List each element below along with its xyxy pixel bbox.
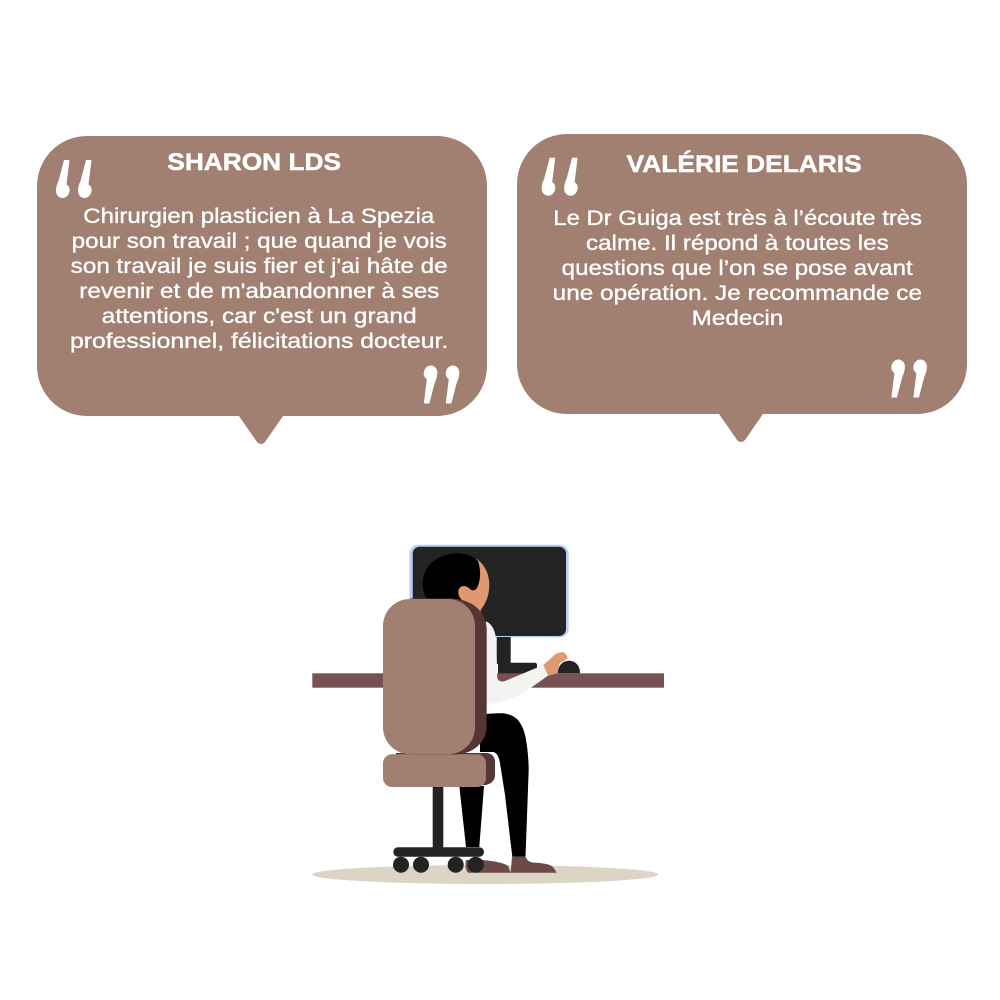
panel: testimonial Sharon LDS [37,136,487,444]
testimonial text: professionnel, félicitations docteur. [70,329,448,353]
icon: closing quote [891,360,927,398]
testimonial text: revenir et de m'abandonner à ses [79,279,439,303]
mouse [558,661,580,673]
panel: testimonial Valérie Delaris [517,134,967,442]
far leg [459,786,484,847]
testimonial text: Medecin [692,306,783,330]
testimonial text: questions que l’on se pose avant [562,256,913,280]
speech bubble [517,134,967,442]
testimonial text: Chirurgien plasticien à La Spezia [83,204,434,228]
monitor [409,545,569,674]
testimonial text: pour son travail ; que quand je vois [72,229,447,253]
heading: Valérie Delaris: VALÉRIE DELARIS [627,150,862,178]
testimonial text: calme. Il répond à toutes les [586,231,889,255]
shoes [466,857,557,873]
speech bubble [37,136,487,444]
heading: Sharon LDS: SHARON LDS [167,149,341,176]
testimonial text [553,206,922,330]
testimonial text: son travail je suis fier et j'ai hâte de [71,254,448,278]
testimonial text: attentions, car c'est un grand [102,304,417,328]
chair wheels [393,857,484,873]
hand [543,652,567,676]
near leg [480,713,529,857]
head [423,553,489,620]
shirt and arm [484,622,548,704]
icon: opening quote [542,158,578,196]
testimonial text: Le Dr Guiga est très à l’écoute très [553,206,922,230]
testimonial text [70,204,448,353]
icon: closing quote [424,366,459,404]
icon: opening quote [56,160,92,198]
testimonial text: une opération. Je recommande ce [553,281,922,305]
desk [312,673,664,688]
chair [383,598,495,857]
ground shadow [312,865,658,884]
illustration: person seated at a computer desk [312,545,664,884]
